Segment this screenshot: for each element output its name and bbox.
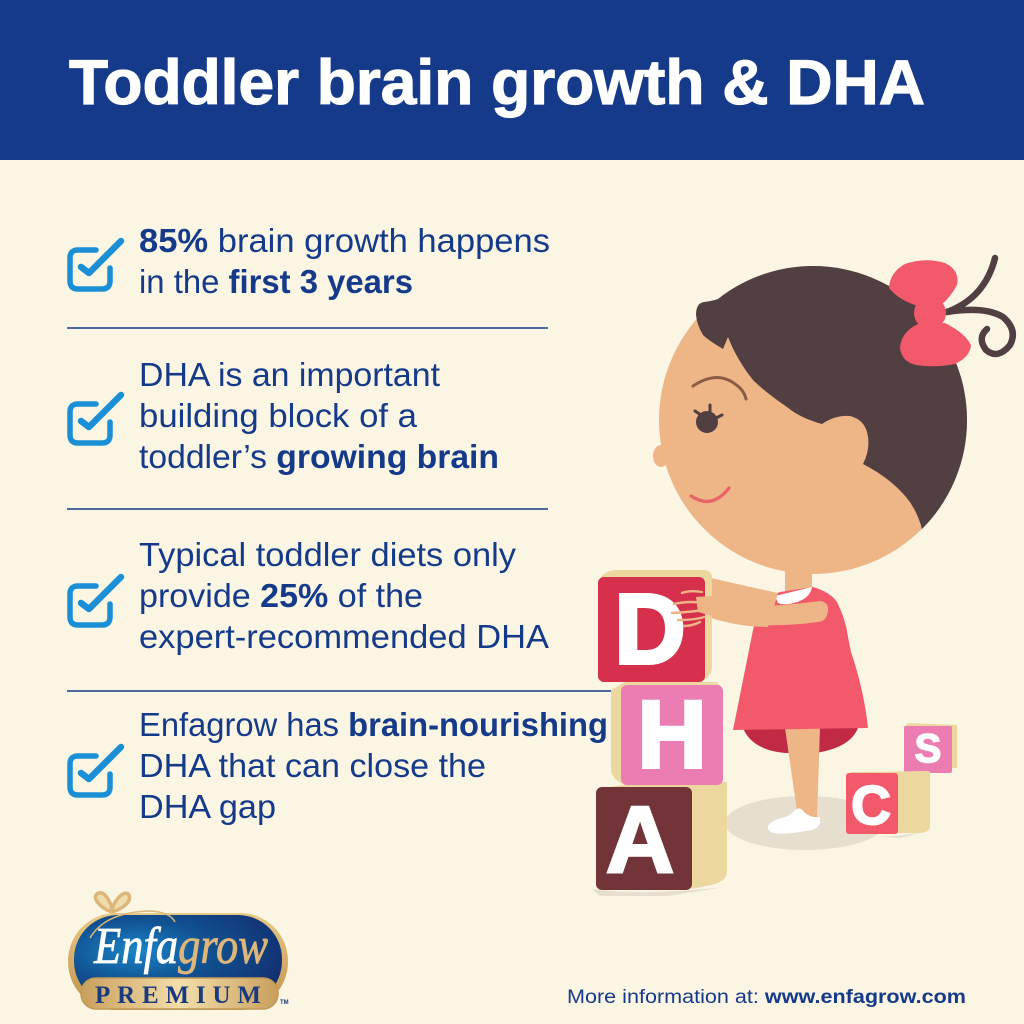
title: Toddler brain growth & DHA bbox=[69, 48, 925, 118]
text: fact 3: Typical toddler diets only bbox=[139, 536, 517, 573]
fact 3 bbox=[70, 536, 549, 655]
nose bbox=[653, 445, 669, 467]
logo trademark: TM bbox=[280, 1000, 289, 1006]
logo badge bbox=[68, 913, 288, 1010]
block: letter C: C bbox=[851, 774, 891, 836]
block: letter S: S bbox=[915, 727, 941, 771]
text: fact 4: Enfagrow has brain-nourishing bbox=[139, 706, 608, 743]
hand on block bbox=[672, 591, 712, 626]
text: fact 3 bbox=[139, 536, 549, 655]
dress bbox=[733, 587, 868, 730]
text: fact 2: toddler’s growing brain bbox=[139, 438, 499, 475]
logo pill bbox=[81, 978, 278, 1009]
block: letter A bbox=[592, 782, 727, 896]
icon: checkbox 3 bbox=[70, 577, 121, 625]
block: letter D bbox=[598, 570, 712, 684]
text: fact 4: DHA gap bbox=[139, 788, 276, 825]
text: fact 1: in the first 3 years bbox=[139, 263, 413, 300]
hair bow bbox=[889, 260, 971, 366]
logo PREMIUM: PREMIUM bbox=[95, 982, 261, 1009]
fact 4 bbox=[70, 706, 608, 825]
text: fact 1 bbox=[139, 222, 550, 300]
footer link: More information at: www.enfagrow.com bbox=[567, 987, 966, 1008]
collar bbox=[775, 587, 812, 604]
divider lines bbox=[67, 328, 612, 691]
icon: checkbox 2 bbox=[70, 395, 121, 443]
logo: Enfagrow Premium bbox=[68, 893, 289, 1010]
text: fact 1: 85% brain growth happens bbox=[139, 222, 550, 259]
neck bbox=[785, 560, 812, 596]
icon: checkbox 1 bbox=[70, 241, 121, 289]
text: fact 4 bbox=[139, 706, 608, 825]
logo wordmark: Enfagrow bbox=[93, 918, 268, 975]
fact 1 bbox=[70, 222, 550, 300]
block: letter A: A bbox=[606, 787, 674, 893]
block: letter H: H bbox=[638, 682, 706, 788]
text: fact 3: provide 25% of the bbox=[139, 577, 423, 614]
head bbox=[659, 266, 967, 574]
text: fact 2 bbox=[139, 356, 499, 475]
leg bbox=[785, 728, 820, 818]
underskirt bbox=[743, 728, 858, 753]
text: fact 2: building block of a bbox=[139, 397, 418, 434]
header banner bbox=[0, 0, 1024, 160]
back arm bbox=[711, 578, 778, 627]
floor shadow bbox=[725, 796, 885, 850]
front arm bbox=[760, 601, 828, 625]
block: letter C bbox=[846, 771, 932, 838]
brow bbox=[693, 377, 746, 399]
smile bbox=[691, 488, 729, 501]
text: fact 4: DHA that can close the bbox=[139, 747, 486, 784]
fact 2 bbox=[70, 356, 499, 475]
logo bow bbox=[95, 893, 130, 912]
block: letter H bbox=[611, 682, 723, 788]
text: fact 3: expert-recommended DHA bbox=[139, 618, 549, 655]
icon: checkbox 4 bbox=[70, 747, 121, 795]
shoe bbox=[768, 808, 820, 834]
illustration: toddler girl bbox=[653, 258, 1013, 850]
hair curl bbox=[947, 258, 1013, 354]
text: fact 2: DHA is an important bbox=[139, 356, 440, 393]
block: letter D: D bbox=[615, 574, 685, 684]
logo ribbon bbox=[90, 911, 175, 938]
block: letter S bbox=[904, 723, 957, 773]
eye bbox=[695, 405, 722, 432]
hair bbox=[696, 266, 967, 529]
